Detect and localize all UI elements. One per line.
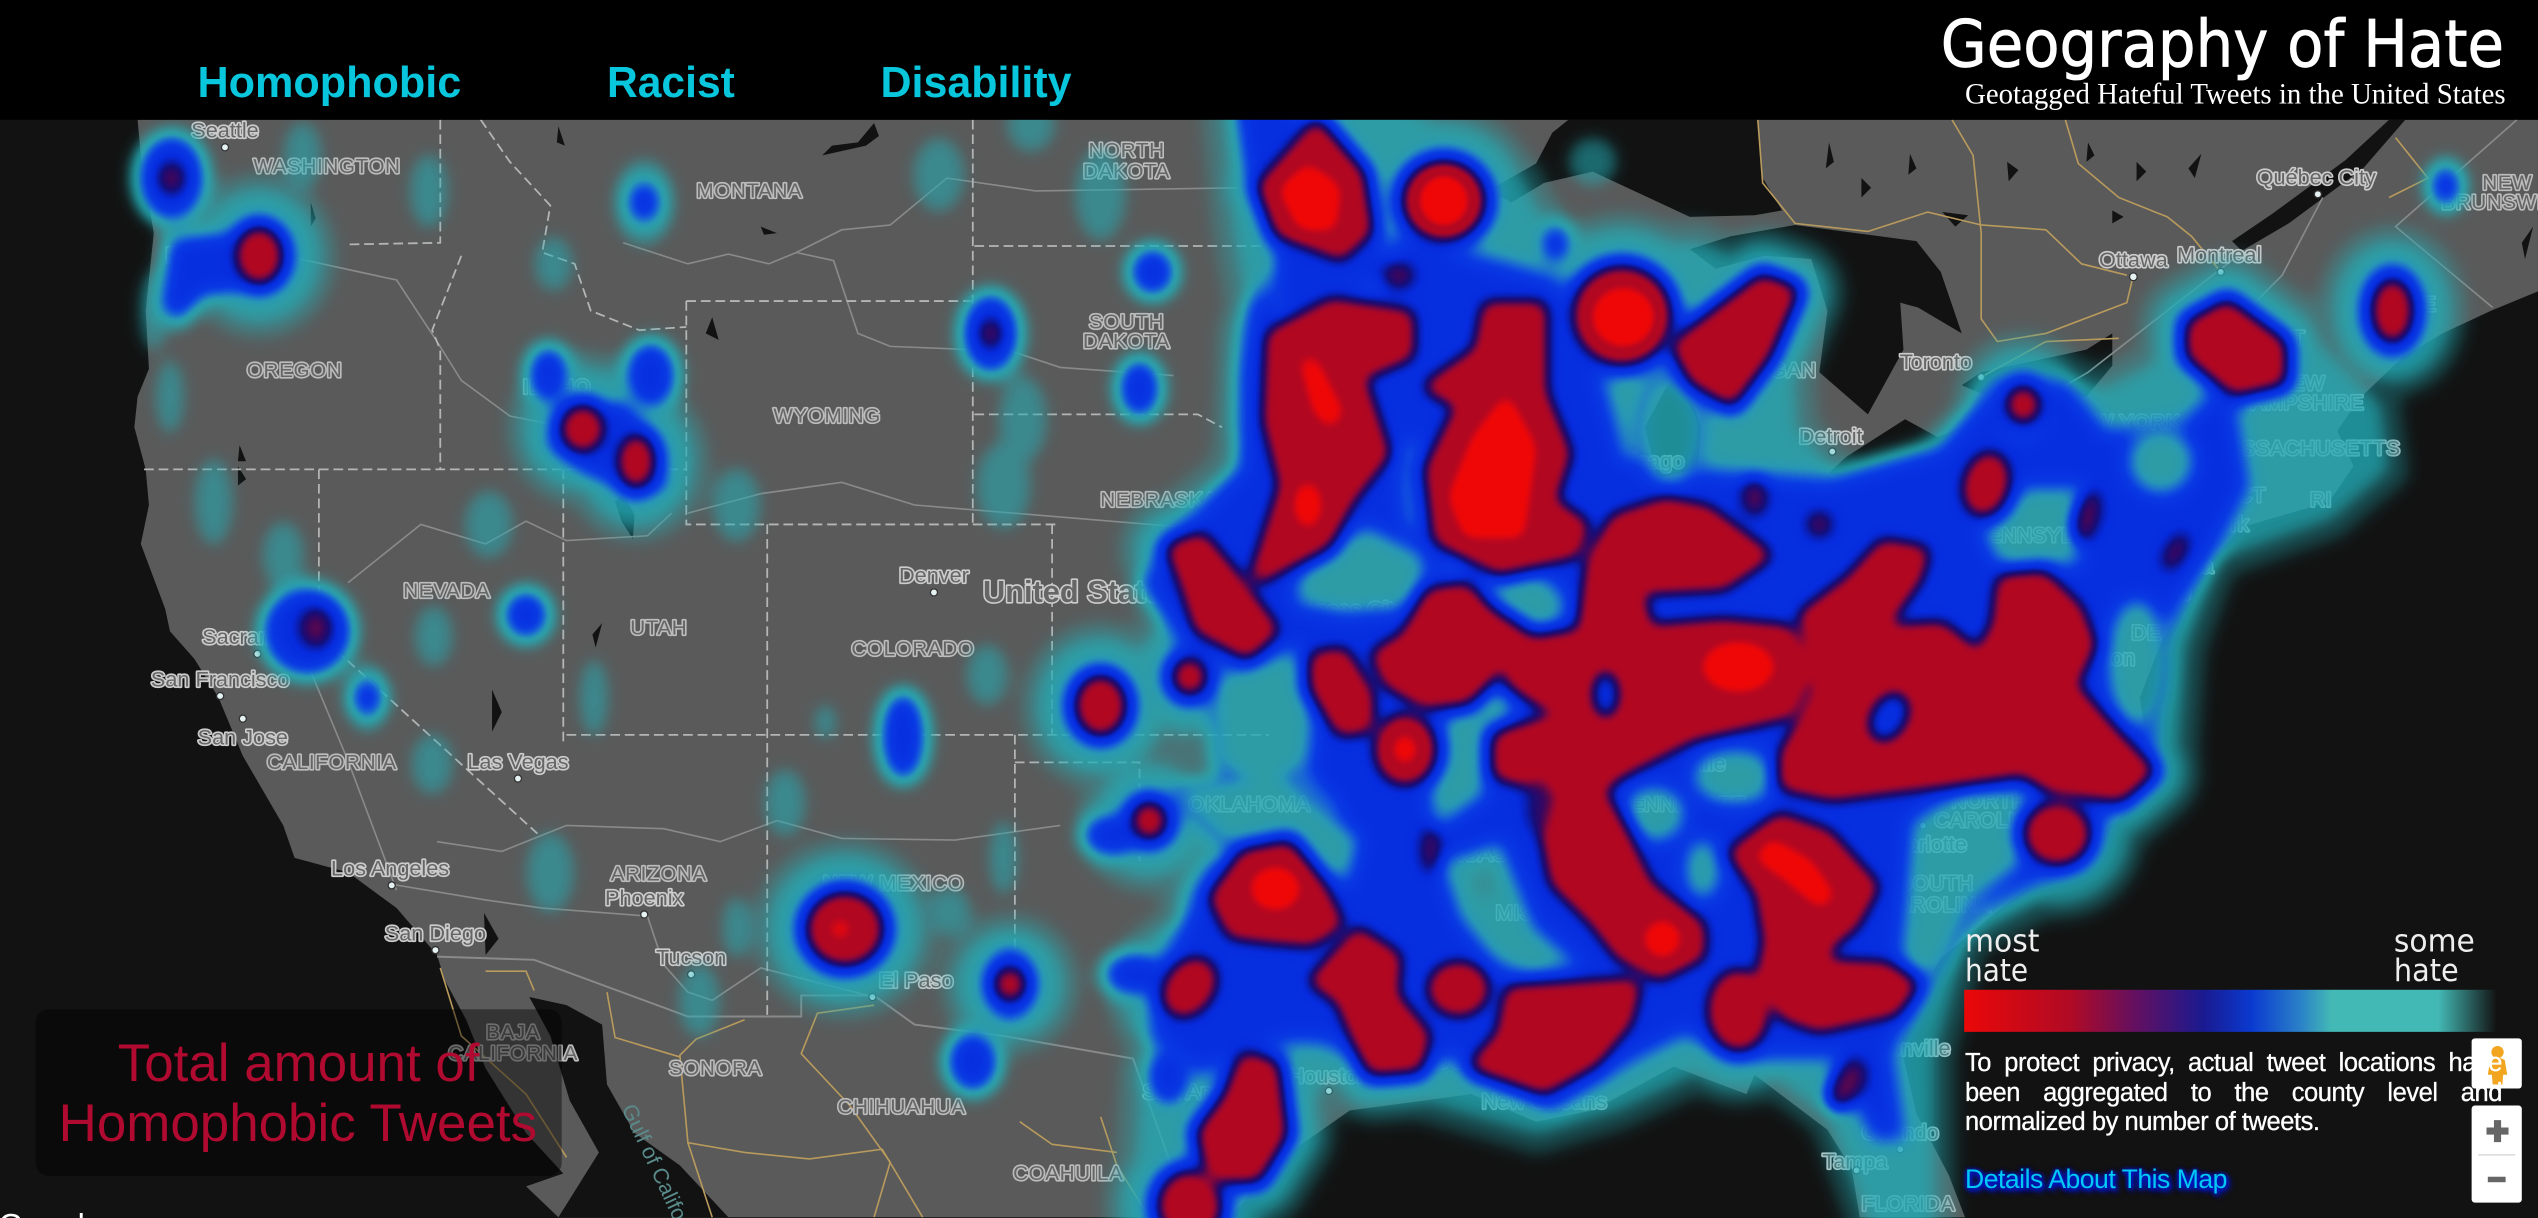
title: Geography of Hate xyxy=(1941,7,2504,82)
map place labels: Tucson xyxy=(656,945,726,970)
map place labels: OKLAHOMA xyxy=(1189,793,1311,816)
map place labels: KENTUCKY xyxy=(1688,706,1805,729)
map place labels: VERMONT xyxy=(2198,327,2305,350)
map place labels: Toronto xyxy=(1900,349,1972,374)
map place labels: DAKOTA xyxy=(1083,330,1170,353)
legend: hate xyxy=(1965,953,2028,989)
map place labels: MONTANA xyxy=(696,179,802,202)
map place labels: Orlando xyxy=(1862,1119,1939,1144)
map place labels: El Paso xyxy=(879,967,953,992)
map place labels: NEBRASKA xyxy=(1100,489,1218,512)
map place labels: NJ xyxy=(2165,583,2192,606)
map place labels: CHIHUAHUA xyxy=(837,1096,966,1119)
map place labels: CAROLINA xyxy=(1881,893,1991,916)
legend: hate xyxy=(2394,953,2459,989)
map place labels: Portland xyxy=(165,242,246,267)
map place labels: Los Angeles xyxy=(331,856,449,881)
map place labels: Austin xyxy=(1200,1037,1260,1062)
map place labels: NEW xyxy=(2482,171,2532,194)
map place labels: Philadelphia xyxy=(2095,553,2214,578)
map place labels: KANSAS xyxy=(1377,657,1465,680)
map place labels: Charlotte xyxy=(1879,831,1967,856)
map place labels: Minneapolis xyxy=(1357,273,1473,298)
map place labels: WEST xyxy=(1885,639,1947,662)
map place labels: Sacramento xyxy=(202,624,319,649)
map place labels: MICHIGAN xyxy=(1709,359,1817,382)
legend: most xyxy=(1965,924,2039,960)
map place labels: SOUTH xyxy=(1089,311,1164,334)
map place labels: San Diego xyxy=(385,920,486,945)
map place labels: Tampa xyxy=(1822,1149,1888,1174)
state and national borders xyxy=(144,120,1269,1020)
map place labels: SONORA xyxy=(669,1057,762,1080)
map place labels: Seattle xyxy=(191,118,259,143)
map place labels: NORTH xyxy=(1951,790,2027,813)
map place labels: ILLINOIS xyxy=(1524,557,1613,580)
zoom control xyxy=(2472,1106,2522,1203)
map place labels: NORTH xyxy=(1089,139,1165,162)
map place labels: San Francisco xyxy=(151,666,289,691)
map place labels: New Orleans xyxy=(1482,1089,1607,1114)
map place labels: Kansas City xyxy=(1289,597,1405,622)
map place labels: ALABAMA xyxy=(1631,931,1733,954)
map place labels: Atlanta xyxy=(1737,869,1805,894)
map place labels: UTAH xyxy=(630,616,687,639)
map place labels: WYOMING xyxy=(773,404,881,427)
map place labels: COAHUILA xyxy=(1013,1162,1123,1185)
map place labels: DAKOTA xyxy=(1083,160,1170,183)
map place labels: San Antonio xyxy=(1143,1079,1259,1104)
category tabs: Homophobic xyxy=(197,59,461,107)
map place labels: Ottawa xyxy=(2099,247,2169,272)
top header bar xyxy=(0,0,2538,120)
legend note text: been aggregated to the county level and xyxy=(1965,1078,2502,1106)
map place labels: INDIANA xyxy=(1654,557,1742,580)
map place labels: CALIFORNIA xyxy=(448,1042,578,1065)
map place labels: DE xyxy=(2131,621,2161,644)
map place labels: GEORGIA xyxy=(1769,945,1870,968)
map place labels: Denver xyxy=(899,563,969,588)
map place labels: Chicago xyxy=(1605,448,1684,473)
map place labels: New York xyxy=(2157,511,2249,536)
category tabs: Racist xyxy=(607,59,735,107)
map place labels: MISSISSIPPI xyxy=(1496,901,1625,924)
map place labels: Houston xyxy=(1289,1063,1369,1088)
map place labels: Québec City xyxy=(2257,165,2376,190)
map place labels: WISCONSIN xyxy=(1490,309,1615,332)
details link: Details About This Map xyxy=(1965,1164,2227,1194)
legend: some xyxy=(2394,924,2475,960)
map place labels: United States xyxy=(983,574,1179,609)
category tabs: Disability xyxy=(881,59,1072,107)
legend note text xyxy=(1965,1049,2502,1136)
legend note text: normalized by number of tweets. xyxy=(1965,1108,2320,1136)
map place labels: Detroit xyxy=(1799,423,1863,448)
panel: map caption: Total amount of xyxy=(118,1034,480,1093)
map place labels: OHIO xyxy=(1808,553,1863,576)
map place labels: OREGON xyxy=(247,359,342,382)
pegman control xyxy=(2472,1038,2522,1089)
map place labels: Indianapolis xyxy=(1648,600,1764,625)
map place labels: HAMPSHIRE xyxy=(2236,392,2364,415)
map place labels: Dallas xyxy=(1250,919,1311,944)
highways in Canada and Mexico xyxy=(440,120,2428,1217)
map place labels: Montreal xyxy=(2177,242,2261,267)
map place labels: CAROLINA xyxy=(1934,809,2044,832)
map place labels: CALIFORNIA xyxy=(267,751,397,774)
city markers xyxy=(207,144,2321,1174)
map place labels: ARKANSAS xyxy=(1390,843,1507,866)
map place labels: RI xyxy=(2310,489,2332,512)
map place labels: COLORADO xyxy=(851,638,974,661)
map place labels: BAJA xyxy=(486,1021,540,1044)
map place labels: Nashville xyxy=(1638,750,1726,775)
category tabs xyxy=(197,59,1072,107)
map place labels: MINNESOTA xyxy=(1270,223,1397,246)
map place labels: Phoenix xyxy=(605,885,684,910)
subtitle: Geotagged Hateful Tweets in the United States xyxy=(1965,78,2506,111)
map place labels: MASSACHUSETTS xyxy=(2209,437,2401,460)
map place labels: NEVADA xyxy=(403,579,490,602)
map place labels: TENNESSEE xyxy=(1616,793,1747,816)
map place labels: IDAHO xyxy=(523,375,591,398)
international border xyxy=(437,957,1190,1217)
map place labels: CT xyxy=(2237,484,2266,507)
legend note text: To protect privacy, actual tweet locations have xyxy=(1965,1049,2502,1077)
map place labels: LOUISIANA xyxy=(1422,1050,1537,1073)
map place labels: San Jose xyxy=(198,725,288,750)
panel: map caption xyxy=(36,1009,562,1176)
map place labels: Washington xyxy=(2021,645,2135,670)
map place labels: Las Vegas xyxy=(467,749,569,774)
map place labels: FLORIDA xyxy=(1861,1193,1955,1216)
legend xyxy=(1964,924,2497,1032)
map place labels: MAINE xyxy=(2368,293,2436,316)
map place labels: WASHINGTON xyxy=(253,155,401,178)
map place labels: PENNSYLVANIA xyxy=(1973,524,2135,547)
panel: map caption: Homophobic Tweets xyxy=(59,1094,537,1153)
map place labels: SOUTH xyxy=(1898,872,1974,895)
map place labels: MISSOURI xyxy=(1389,659,1496,682)
map place labels: Jacksonville xyxy=(1834,1035,1951,1060)
map place labels: NEW MEXICO xyxy=(823,872,964,895)
map place labels: NEW xyxy=(2275,372,2325,395)
road network xyxy=(299,120,2517,1000)
map place labels: VIRGINIA xyxy=(1869,659,1964,682)
map place labels: NEW YORK xyxy=(2064,411,2180,434)
map place labels: IOWA xyxy=(1373,463,1430,486)
map place labels: VIRGINIA xyxy=(1958,706,2053,729)
map place labels: ARIZONA xyxy=(611,863,707,886)
